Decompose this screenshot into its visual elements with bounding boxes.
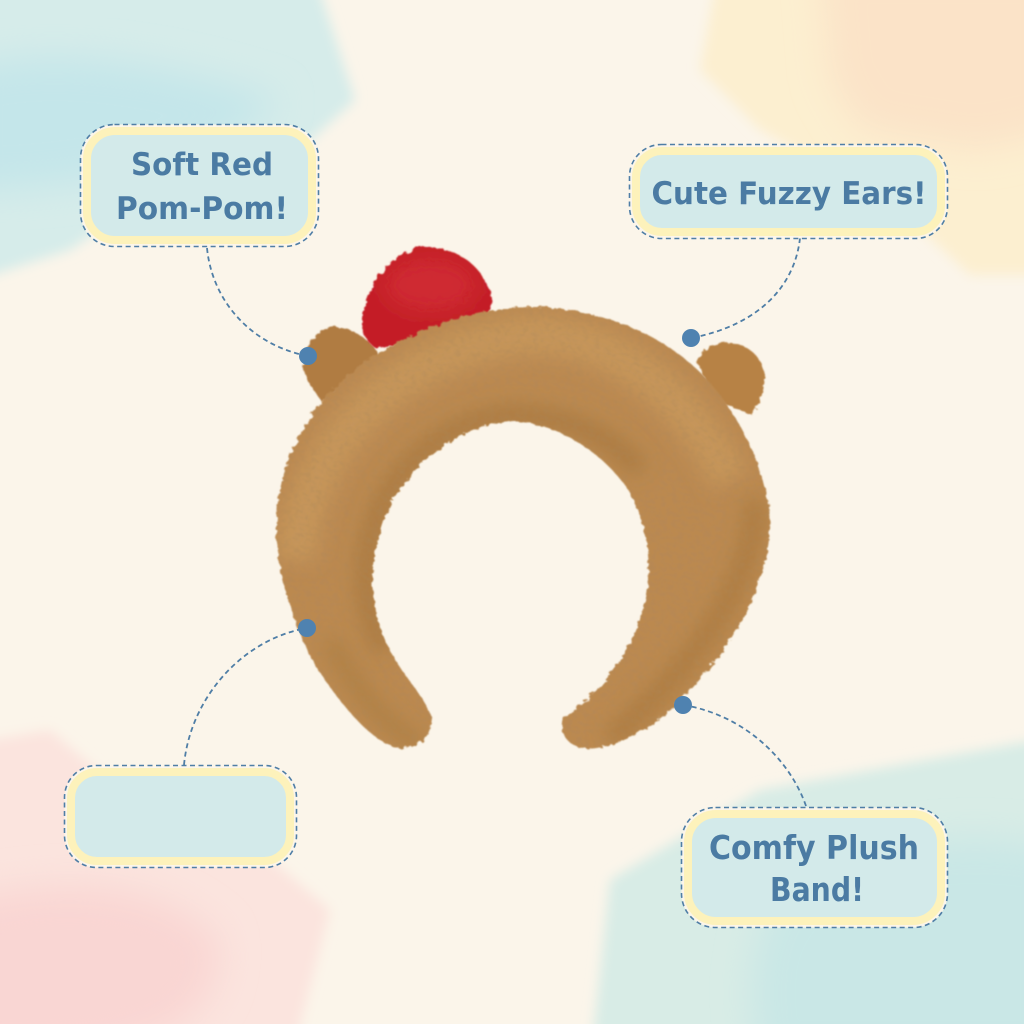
callout: empty label	[64, 766, 296, 868]
icon: fur band	[274, 304, 772, 750]
callout: Soft Red Pom-Pom	[80, 124, 318, 246]
callout: Soft Red Pom-Pom: Pom-Pom!	[116, 191, 288, 227]
connector: Cute Fuzzy Ears	[682, 238, 800, 347]
callout: Comfy Plush Band: Comfy Plush	[709, 828, 919, 867]
icon: red pom-pom	[362, 247, 492, 349]
connector: Comfy Plush Band	[674, 696, 806, 806]
illustration: plush headband with ears and red pom-pom	[260, 247, 790, 760]
callout: Soft Red Pom-Pom: Soft Red	[131, 147, 273, 183]
icon: right fuzzy ear	[697, 343, 764, 415]
connector: Soft Red Pom-Pom	[207, 248, 317, 365]
callout: Cute Fuzzy Ears	[630, 144, 948, 238]
callout: Comfy Plush Band	[682, 808, 948, 928]
icon: left fuzzy ear	[304, 327, 378, 402]
callout: Comfy Plush Band: Band!	[770, 870, 864, 909]
connector: empty label	[184, 619, 316, 765]
callout: Cute Fuzzy Ears: Cute Fuzzy Ears!	[652, 176, 926, 212]
